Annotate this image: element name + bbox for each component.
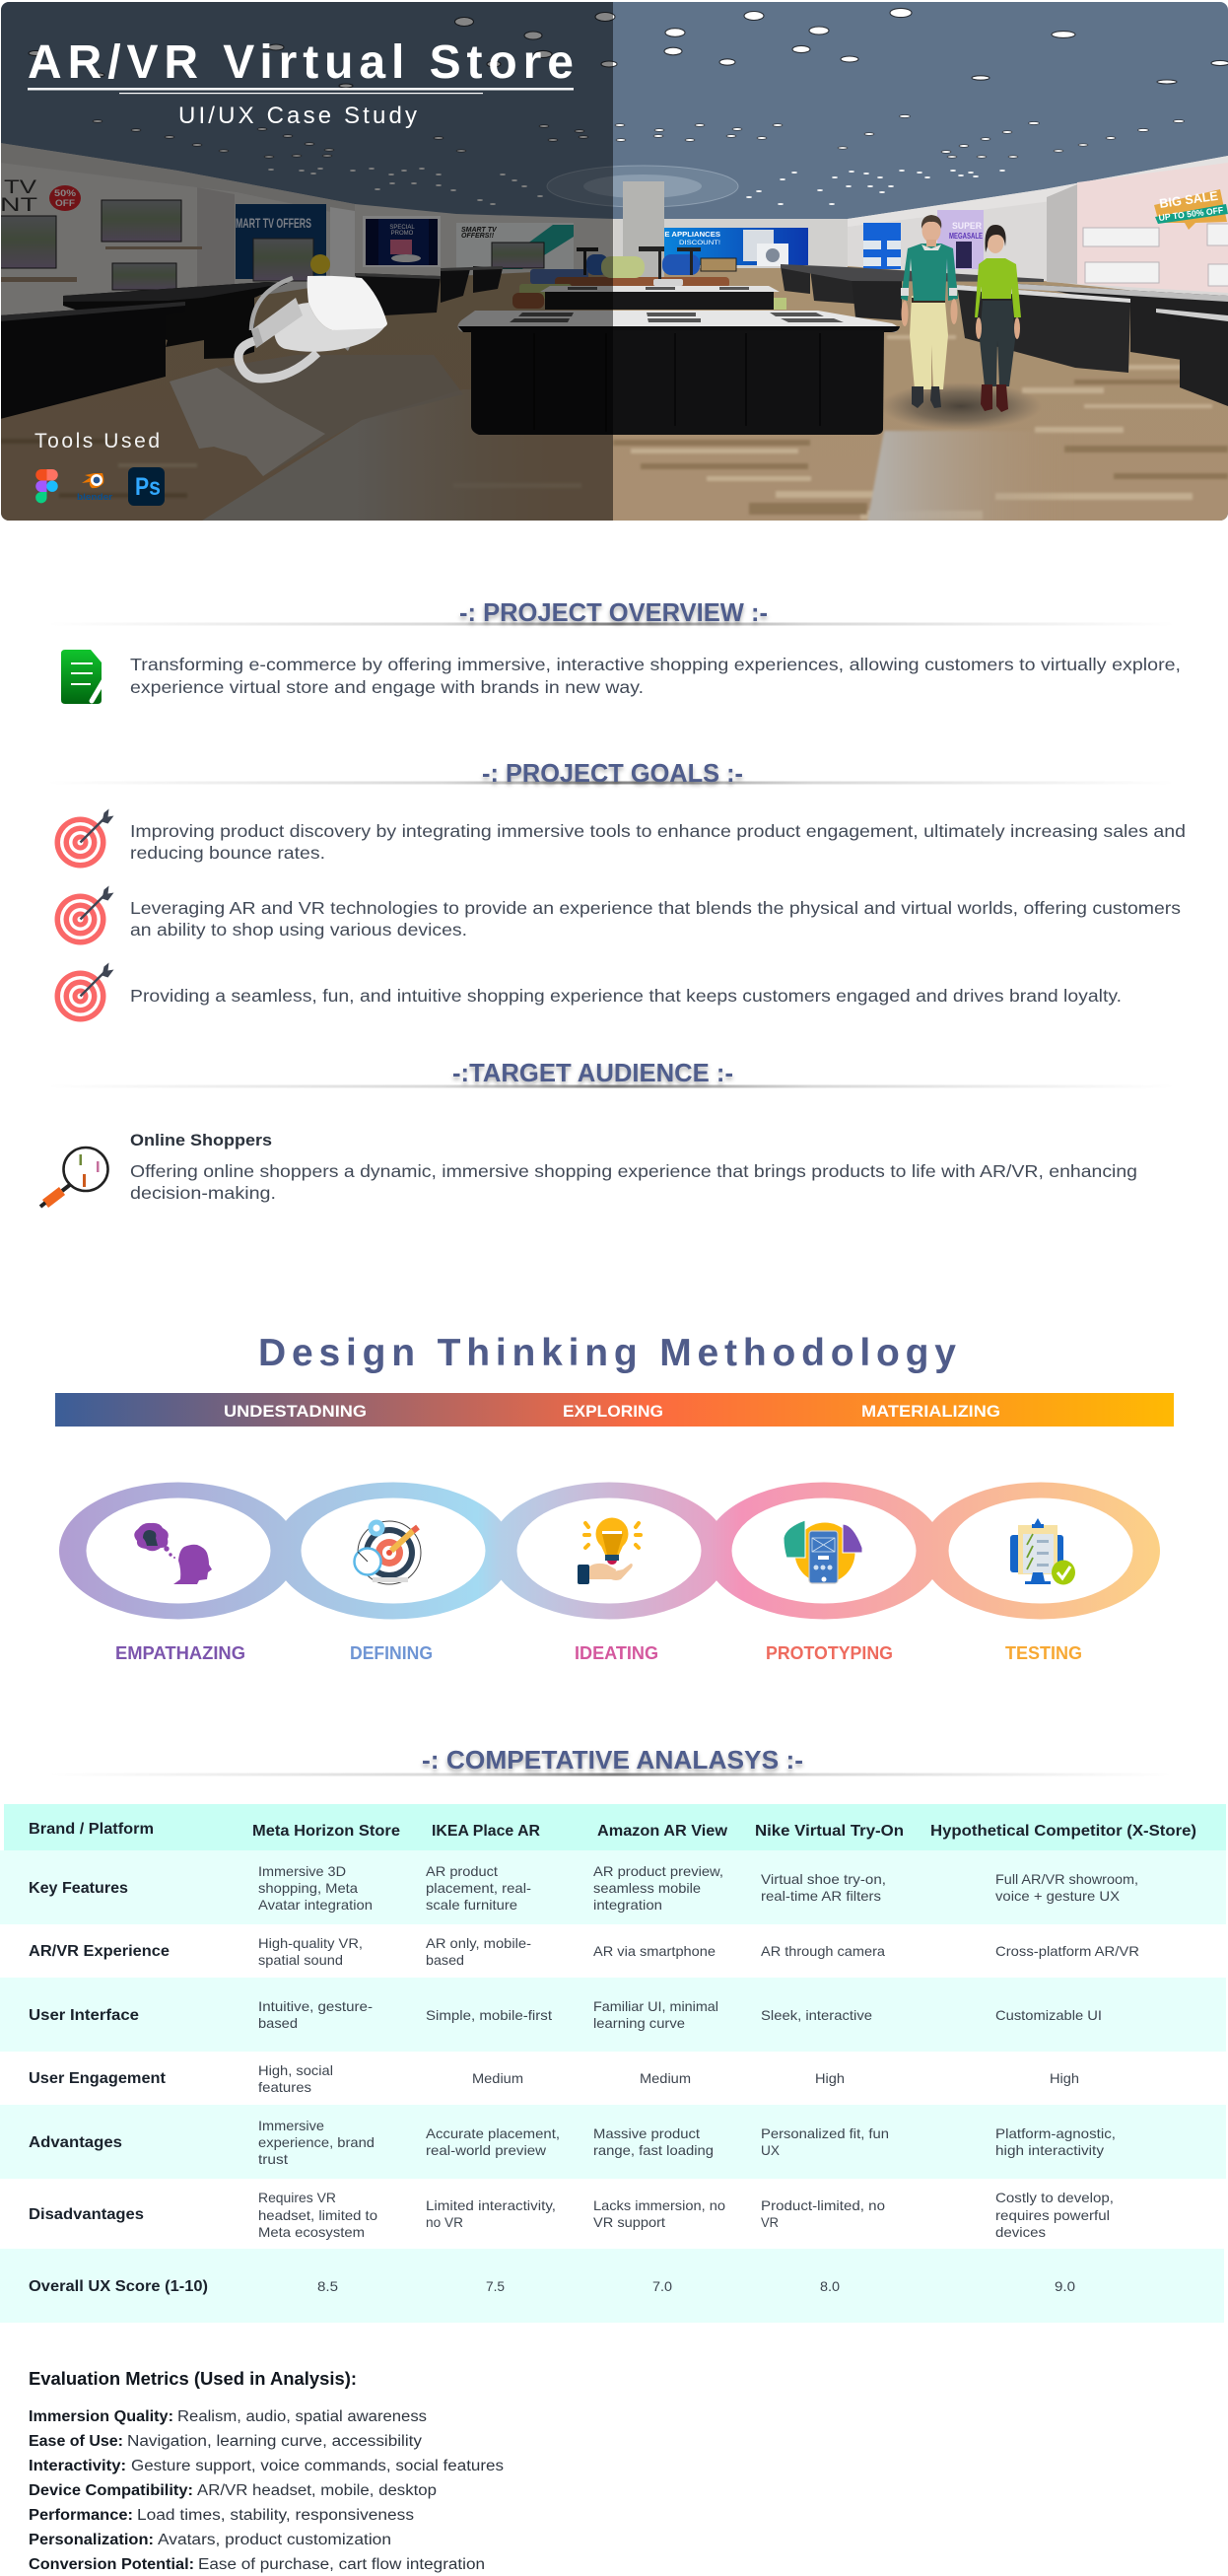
row: AR/VR experience: AR only, mobile- — [426, 1935, 531, 1951]
table header: Brand / Platform — [29, 1821, 154, 1838]
row: key features: shopping, Meta — [258, 1880, 358, 1896]
dark overlay on left half — [0, 0, 613, 522]
metrics list: Personalization: — [29, 2532, 154, 2548]
row: AR/VR experience: AR via smartphone — [593, 1943, 716, 1959]
row: disadvantages: Product-limited, no — [761, 2197, 885, 2213]
row: advantages: real-world preview — [426, 2142, 547, 2158]
metrics list: Ease of purchase, cart flow integration — [198, 2556, 485, 2573]
metrics list: Realism, audio, spatial awareness — [177, 2408, 427, 2425]
evaluation metrics — [29, 2368, 504, 2573]
store posters and TVs: ME APPLIANCES — [658, 230, 720, 239]
row: user engagement: User Engagement — [29, 2070, 166, 2087]
audience text: Online Shoppers — [130, 1132, 272, 1149]
row: advantages: Platform-agnostic, — [995, 2125, 1116, 2141]
gradient phase bar — [55, 1393, 1174, 1427]
store counters — [0, 264, 1228, 435]
store pillar and center seating — [512, 166, 786, 310]
gradient phase bar: UNDESTADNING — [224, 1402, 367, 1421]
heading: project overview: -: PROJECT OVERVIEW :- — [459, 597, 768, 627]
row: disadvantages: Requires VR — [258, 2190, 336, 2205]
metrics list: Device Compatibility: — [29, 2482, 193, 2499]
goal 1 text: reducing bounce rates. — [130, 843, 325, 863]
row: user engagement: Medium — [640, 2070, 691, 2086]
row: user engagement: features — [258, 2079, 311, 2095]
audience text: Offering online shoppers a dynamic, immersive shopping experience that brings products to life with AR/VR, enhancing — [130, 1161, 1137, 1181]
row: disadvantages: devices — [995, 2224, 1046, 2240]
store posters and TVs: MEGASALE — [949, 232, 983, 241]
row: disadvantages: headset, limited to — [258, 2207, 377, 2223]
metrics list: Gesture support, voice commands, social features — [131, 2458, 504, 2474]
row: disadvantages: Meta ecosystem — [258, 2224, 365, 2240]
overview text: Transforming e-commerce by offering immersive, interactive shopping experiences, allowing customers to virtually explore, — [130, 655, 1181, 674]
row: AR/VR experience: AR/VR Experience — [29, 1943, 170, 1960]
row: user engagement: High, social — [258, 2062, 333, 2078]
metrics list: Ease of Use: — [29, 2433, 123, 2450]
audience text — [130, 1132, 1137, 1203]
row: disadvantages: Disadvantages — [29, 2206, 144, 2223]
phase labels: TESTING — [1005, 1643, 1082, 1663]
goal 2 text — [130, 898, 1181, 940]
row: advantages: range, fast loading — [593, 2142, 714, 2158]
row: advantages: Accurate placement, — [426, 2125, 560, 2141]
phase labels: PROTOTYPING — [766, 1643, 893, 1663]
icon: defining — [355, 1520, 421, 1584]
goal 2 text: Leveraging AR and VR technologies to provide an experience that blends the physical and virtual worlds, offering customers — [130, 898, 1181, 918]
row: key features: Virtual shoe try-on, — [761, 1871, 886, 1887]
store posters and TVs: SUPER — [952, 221, 982, 231]
phase labels: EMPATHAZING — [115, 1643, 245, 1663]
gradient phase bar: EXPLORING — [563, 1402, 663, 1421]
row: AR/VR experience — [29, 1935, 1139, 1968]
phase labels — [115, 1643, 1082, 1663]
tools used: Tools Used — [34, 430, 160, 453]
store posters and TVs: TV — [4, 177, 36, 198]
store posters and TVs: SPECIAL — [389, 225, 415, 231]
overview text: experience virtual store and engage with brands in new way. — [130, 677, 644, 697]
row: key features: scale furniture — [426, 1897, 517, 1913]
row: user interface — [0, 1978, 1226, 2052]
goal 2 text: an ability to shop using various devices. — [130, 920, 467, 940]
row: user interface: Sleek, interactive — [761, 2007, 872, 2023]
row: overall UX score: Overall UX Score (1-10) — [29, 2278, 208, 2295]
metrics list — [29, 2408, 504, 2573]
metrics list: Load times, stability, responsiveness — [137, 2507, 414, 2524]
goal 1 text: Improving product discovery by integrating immersive tools to enhance product engagement, ultimately increasing sales and — [130, 821, 1186, 841]
audience text: decision-making. — [130, 1183, 276, 1203]
row: user interface: learning curve — [593, 2015, 685, 2031]
heading: project goals — [47, 758, 1175, 788]
phase labels: DEFINING — [350, 1643, 433, 1663]
table header: Nike Virtual Try-On — [755, 1823, 904, 1840]
metrics list: Performance: — [29, 2507, 133, 2524]
row: advantages: experience, brand — [258, 2134, 375, 2150]
metrics heading: Evaluation Metrics (Used in Analysis): — [29, 2368, 357, 2389]
gradient phase bar: MATERIALIZING — [861, 1402, 1000, 1421]
row: key features: AR product — [426, 1863, 498, 1879]
row: overall UX score — [0, 2249, 1224, 2323]
row: advantages: high interactivity — [995, 2142, 1104, 2158]
row: AR/VR experience: AR through camera — [761, 1943, 885, 1959]
ceiling lights — [29, 8, 1228, 205]
icon: target 1 — [55, 808, 114, 868]
heading: target audience: -:TARGET AUDIENCE :- — [452, 1058, 733, 1087]
row: user engagement: High — [815, 2070, 845, 2086]
table header — [4, 1804, 1226, 1850]
row: disadvantages — [29, 2190, 1114, 2240]
icon: VR headset — [239, 276, 387, 379]
row: advantages: Personalized fit, fun — [761, 2125, 889, 2141]
row: key features: seamless mobile — [593, 1880, 701, 1896]
icon: target 3 — [55, 962, 114, 1021]
row: overall UX score: 8.5 — [317, 2278, 338, 2294]
heading: competitive analysis — [49, 1745, 1173, 1776]
row: user interface: Simple, mobile-first — [426, 2007, 552, 2023]
section: project goals — [47, 758, 1186, 1021]
row: overall UX score: 7.5 — [486, 2278, 505, 2294]
icon: Blender: blender — [77, 492, 113, 502]
icon: testing — [1010, 1518, 1075, 1585]
store posters and TVs: NT — [0, 195, 38, 216]
row: key features: Key Features — [29, 1880, 128, 1897]
row: advantages: Immersive — [258, 2118, 324, 2133]
phase labels: IDEATING — [575, 1643, 658, 1663]
row: disadvantages: Limited interactivity, — [426, 2197, 556, 2213]
row: user interface: Intuitive, gesture- — [258, 1998, 373, 2014]
row: user interface: Familiar UI, minimal — [593, 1998, 718, 2014]
avatars: man and woman — [880, 215, 1042, 430]
row: key features: Avatar integration — [258, 1897, 373, 1913]
title — [28, 36, 574, 129]
heading: target audience — [47, 1058, 1175, 1088]
row: key features: Immersive 3D — [258, 1863, 346, 1879]
heading: competitive analysis: -: COMPETATIVE ANALASYS :- — [422, 1745, 803, 1775]
metrics list: Avatars, product customization — [158, 2532, 391, 2548]
store posters and TVs: BIG SALE — [1158, 188, 1219, 211]
metrics list: Conversion Potential: — [29, 2556, 194, 2573]
row: AR/VR experience: High-quality VR, — [258, 1935, 363, 1951]
overview text — [130, 655, 1181, 697]
hero banner — [0, 0, 1228, 522]
store posters and TVs: DISCOUNT! — [679, 240, 720, 246]
row: advantages: Massive product — [593, 2125, 700, 2141]
heading: project overview — [47, 597, 1175, 627]
table header: Hypothetical Competitor (X-Store) — [930, 1823, 1196, 1840]
icon: empathizing — [134, 1523, 212, 1584]
row: disadvantages: no VR — [426, 2214, 463, 2230]
icon: document — [61, 650, 104, 704]
linked rings — [59, 1483, 1160, 1619]
competitive analysis table — [0, 1804, 1226, 2323]
row: overall UX score: 8.0 — [820, 2278, 840, 2294]
row: advantages: Advantages — [29, 2134, 122, 2151]
subtitle: UI/UX Case Study — [178, 103, 417, 129]
store posters and TVs: OFF — [55, 198, 76, 208]
icon: Figma — [35, 469, 58, 503]
row: key features: AR product preview, — [593, 1863, 723, 1879]
heading: project goals: -: PROJECT GOALS :- — [482, 758, 743, 788]
row: overall UX score: 7.0 — [652, 2278, 672, 2294]
table header: Amazon AR View — [597, 1823, 728, 1840]
row: AR/VR experience: based — [426, 1952, 464, 1968]
table header: IKEA Place AR — [432, 1823, 540, 1840]
section: project overview — [47, 597, 1181, 704]
row: key features — [0, 1850, 1226, 1924]
store posters and TVs: OFFERS!! — [461, 233, 495, 240]
row: user interface: Customizable UI — [995, 2007, 1102, 2023]
store posters and TVs: PROMO — [391, 231, 414, 237]
title: design thinking methodology: Design Thinking Methodology — [258, 1332, 956, 1374]
row: disadvantages: requires powerful — [995, 2207, 1110, 2223]
row: advantages — [0, 2105, 1226, 2179]
row: user interface: User Interface — [29, 2007, 139, 2024]
icon: prototyping — [784, 1520, 862, 1583]
row: key features: placement, real- — [426, 1880, 531, 1896]
row: disadvantages: VR — [761, 2214, 779, 2230]
goal 3 text: Providing a seamless, fun, and intuitive shopping experience that keeps customers engaged and drives brand loyalty. — [130, 986, 1122, 1006]
tools used — [34, 430, 165, 506]
metrics list: AR/VR headset, mobile, desktop — [197, 2482, 437, 2499]
row: user engagement: High — [1050, 2070, 1079, 2086]
row: AR/VR experience: spatial sound — [258, 1952, 343, 1968]
store posters and TVs: SMART TV — [461, 227, 498, 234]
row: key features: voice + gesture UX — [995, 1888, 1121, 1904]
metrics list: Navigation, learning curve, accessibility — [127, 2433, 422, 2450]
icon: target 2 — [55, 885, 114, 944]
row: key features: Full AR/VR showroom, — [995, 1871, 1138, 1887]
row: overall UX score: 9.0 — [1055, 2278, 1075, 2294]
row: key features: real-time AR filters — [761, 1888, 881, 1904]
row: disadvantages: Costly to develop, — [995, 2190, 1114, 2205]
store posters and TVs: UP TO 50% OFF — [1158, 205, 1224, 223]
table header: Meta Horizon Store — [252, 1823, 400, 1840]
goal 1 text — [130, 821, 1186, 863]
icon: magnifier — [40, 1148, 108, 1207]
store posters and TVs — [0, 177, 1228, 290]
title: AR/VR Virtual Store — [28, 36, 574, 89]
row: advantages: trust — [258, 2151, 288, 2167]
row: disadvantages: Lacks immersion, no — [593, 2197, 725, 2213]
metrics list: Immersion Quality: — [29, 2408, 173, 2425]
row: user interface: based — [258, 2015, 298, 2031]
row: AR/VR experience: Cross-platform AR/VR — [995, 1943, 1139, 1959]
store posters and TVs: MART TV OFFERS — [236, 215, 311, 231]
row: disadvantages: VR support — [593, 2214, 665, 2230]
section: target audience — [40, 1058, 1175, 1207]
row: advantages: UX — [761, 2142, 781, 2158]
row: user engagement: Medium — [472, 2070, 523, 2086]
icon: Photoshop: Ps — [135, 473, 161, 501]
icon: ideating — [578, 1518, 641, 1584]
row: key features: integration — [593, 1897, 662, 1913]
store posters and TVs: 50% — [54, 188, 76, 198]
metrics list: Interactivity: — [29, 2458, 126, 2474]
row: user engagement — [29, 2062, 1079, 2095]
